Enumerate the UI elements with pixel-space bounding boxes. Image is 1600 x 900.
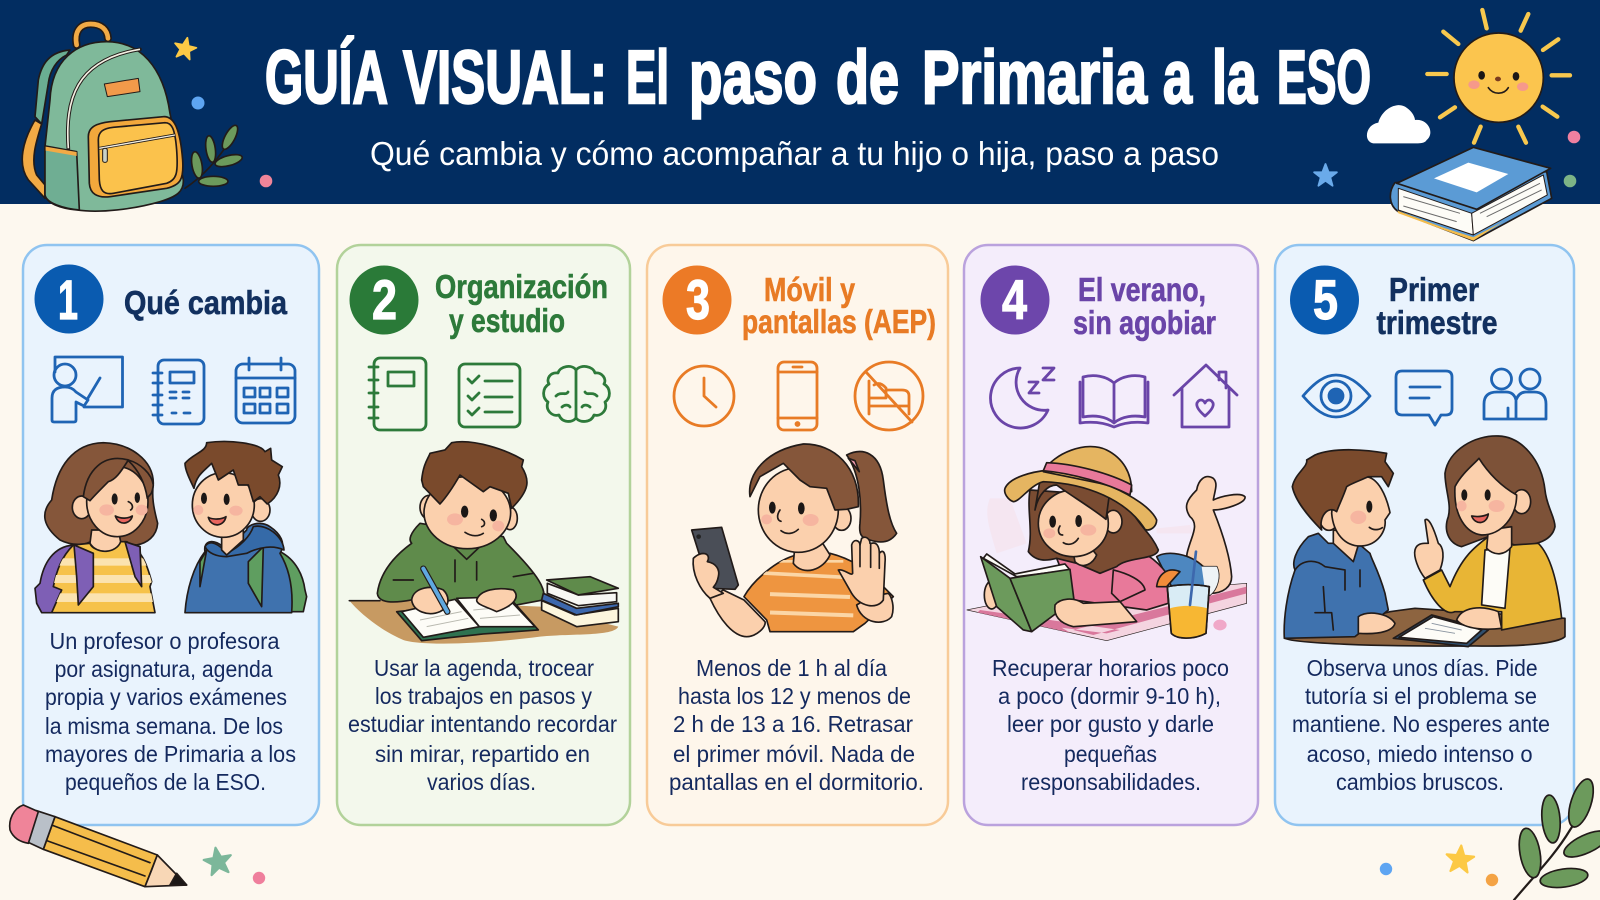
illustration: girl with hat reading on blanket: [967, 447, 1247, 641]
description text: los trabajos en pasos y: [375, 683, 592, 709]
heading: Móvil y: [764, 271, 856, 308]
decoration: blue star: [1314, 164, 1337, 186]
number badge 4: 4: [1002, 268, 1027, 331]
cloud: [1367, 105, 1430, 143]
description text: mantiene. No esperes ante: [1292, 711, 1550, 737]
icon: notebook: [369, 358, 426, 430]
number badge 3: [662, 266, 732, 334]
icon: house with heart: [1174, 365, 1237, 427]
title: [265, 35, 1371, 119]
sun face: [1454, 33, 1543, 122]
icon: smartphone: [778, 362, 817, 430]
panel: 3 móvil y pantallas: [647, 245, 948, 825]
number badge 1: 1: [58, 268, 78, 331]
decoration: green star: [202, 845, 234, 876]
description text: varios días.: [427, 769, 536, 795]
book: [1390, 147, 1552, 241]
number badge 4: [980, 266, 1050, 334]
title: a: [1163, 35, 1193, 119]
description text: pantallas en el dormitorio.: [669, 769, 924, 795]
decoration: bottom yellow star: [1445, 844, 1475, 873]
description text: por asignatura, agenda: [55, 656, 273, 682]
title: GUÍA: [265, 35, 388, 119]
subtitle: Qué cambia y cómo acompañar a tu hijo o hija, paso a paso: [370, 135, 1219, 172]
decoration: header sprig: [185, 123, 243, 188]
description text: Observa unos días. Pide: [1307, 655, 1538, 681]
heading: El verano,: [1078, 271, 1206, 308]
title: Primaria: [922, 35, 1148, 119]
heading: [435, 268, 608, 339]
decoration: bottom blue dot: [1380, 863, 1392, 875]
icon: clock: [674, 366, 734, 426]
icon: speech bubble: [1396, 371, 1452, 425]
heading: [742, 271, 936, 340]
panel: 1 qué cambia: [23, 245, 319, 825]
title: de: [836, 35, 899, 119]
icon: eye: [1303, 375, 1370, 417]
decoration: backpack: [22, 24, 183, 211]
icon: teacher at board: [52, 357, 122, 422]
description text: la misma semana. De los: [45, 713, 283, 739]
heading: Primer: [1389, 271, 1479, 308]
icon: agenda: [153, 360, 204, 424]
title: VISUAL:: [403, 35, 607, 119]
heading: pantallas (AEP): [742, 303, 936, 340]
card background: [1275, 245, 1574, 825]
description text: [45, 628, 296, 795]
card background: [964, 245, 1258, 825]
description text: Un profesor o profesora: [50, 628, 280, 654]
header band: [0, 0, 1600, 204]
panel: 2 organización y estudio: [337, 245, 630, 825]
description text: pequeñas: [1064, 741, 1157, 767]
title: la: [1212, 35, 1258, 119]
description text: a poco (dormir 9-10 h),: [998, 683, 1221, 709]
description text: [992, 655, 1229, 795]
card background: [23, 245, 319, 825]
description text: estudiar intentando recordar: [348, 711, 617, 737]
decoration: header yellow star: [172, 35, 198, 60]
decoration: bottom pink dot: [253, 872, 265, 884]
description text: tutoría si el problema se: [1305, 683, 1537, 709]
icon: checklist: [459, 364, 520, 427]
icon: moon and zz: [991, 368, 1054, 428]
heading: [1073, 271, 1216, 341]
icon: no screens in bed: [855, 362, 923, 430]
icon: calendar: [236, 358, 295, 423]
card background: [647, 245, 948, 825]
description text: acoso, miedo intenso o: [1307, 741, 1533, 767]
title: paso: [689, 35, 817, 119]
description text: propia y varios exámenes: [45, 684, 287, 710]
number badge 2: [350, 266, 418, 334]
heading: trimestre: [1376, 304, 1498, 341]
decoration: pencil: [10, 805, 187, 887]
heading: sin agobiar: [1073, 304, 1216, 341]
decoration: header dots: [192, 96, 1580, 187]
heading: y estudio: [449, 302, 565, 339]
illustration: girl and boy with backpacks: [35, 441, 307, 613]
description text: responsabilidades.: [1021, 769, 1201, 795]
heading: Organización: [435, 268, 608, 305]
decoration: bottom orange dot: [1486, 874, 1498, 886]
description text: [669, 655, 924, 795]
decoration: corner branch: [1514, 776, 1600, 900]
description text: Usar la agenda, trocear: [374, 655, 594, 681]
description text: el primer móvil. Nada de: [673, 741, 915, 767]
description text: [348, 655, 617, 795]
panel: 4 el verano: [964, 245, 1258, 825]
panel: 5 primer trimestre: [1275, 245, 1574, 825]
number badge 1: [34, 264, 104, 334]
description text: [1292, 655, 1550, 795]
illustration: boy and adult talking at table: [1284, 436, 1565, 647]
description text: Recuperar horarios poco: [992, 655, 1229, 681]
description text: cambios bruscos.: [1336, 769, 1504, 795]
title: ESO: [1277, 35, 1371, 119]
card background: [337, 245, 630, 825]
description text: leer por gusto y darle: [1007, 711, 1214, 737]
description text: mayores de Primaria a los: [45, 741, 296, 767]
number badge 5: 5: [1313, 268, 1338, 331]
icon: brain: [544, 366, 609, 421]
description text: hasta los 12 y menos de: [678, 683, 911, 709]
sun rays: [1427, 10, 1570, 143]
description text: pequeños de la ESO.: [65, 769, 266, 795]
number badge 3: 3: [686, 268, 710, 331]
decoration: smiling sun, cloud and book: [1367, 10, 1570, 241]
heading: [1376, 271, 1498, 341]
title: El: [626, 35, 669, 119]
illustration: girl with phone raising hand: [692, 444, 897, 637]
description text: Menos de 1 h al día: [696, 655, 887, 681]
number badge 2: 2: [372, 268, 397, 331]
heading: Qué cambia: [124, 284, 288, 321]
number badge 5: [1290, 266, 1359, 334]
icon: two people: [1484, 369, 1546, 419]
description text: sin mirar, repartido en: [375, 741, 590, 767]
illustration: boy studying at desk: [349, 442, 618, 644]
description text: 2 h de 13 a 16. Retrasar: [673, 711, 913, 737]
icon: open book: [1080, 376, 1148, 427]
